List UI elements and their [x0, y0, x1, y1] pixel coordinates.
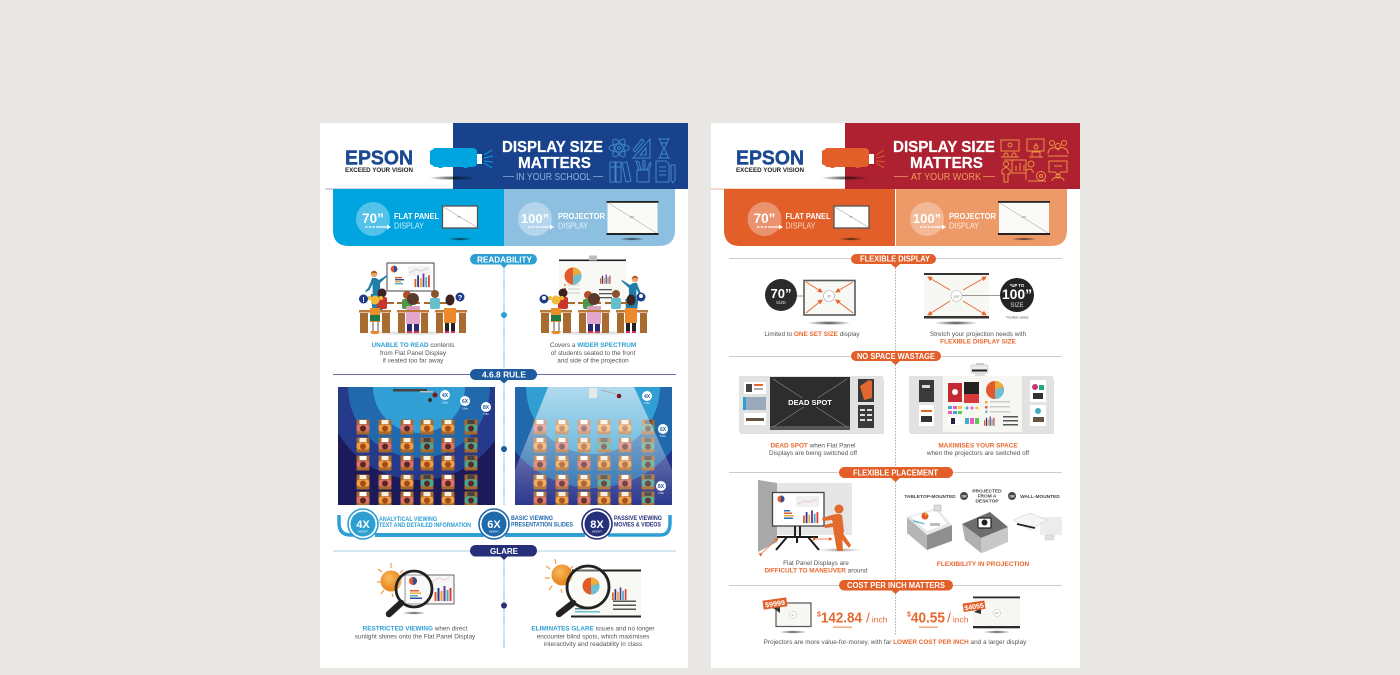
- zone badges: 5.8m: [462, 406, 469, 410]
- zone badges: 6X: [660, 427, 667, 433]
- projector size badge: [518, 202, 554, 236]
- zone badges: 8X: [483, 405, 490, 411]
- illustration: moving flat panel on stand: [758, 480, 862, 553]
- section: flexible placement: [729, 467, 1062, 574]
- title: DISPLAY SIZE: [893, 139, 995, 156]
- labels: mounting options: DESKTOP: [975, 498, 999, 504]
- labels: mounting options: WALL-MOUNTED: [1020, 494, 1060, 500]
- illustration: wall with dead spot: DEAD SPOT: [788, 398, 832, 407]
- icon: projector screen: [998, 201, 1050, 240]
- illustration: fixed-size display: 70”: [771, 286, 791, 301]
- illustration: classroom with projector: [538, 256, 650, 336]
- labels: mounting options: OR: [961, 494, 967, 498]
- heading: no space wastage: [851, 351, 941, 365]
- text: eliminates glare: interactivity and readability in class: [544, 641, 642, 648]
- zone badges: 4X: [442, 393, 449, 399]
- badge: 6X: HEIGHT: [489, 530, 499, 534]
- section: cost per inch matters: [729, 580, 1062, 646]
- legend: viewing distance bar: [339, 509, 670, 539]
- text: analytical viewing: ANALYTICAL VIEWING: [379, 516, 437, 523]
- section: no space wastage: [729, 351, 1062, 457]
- heading: flexible placement: [839, 467, 953, 482]
- figure: flat panel cost per inch: /inch: [866, 610, 888, 626]
- text: eliminates glare: ELIMINATES GLARE issues and no longer: [531, 626, 655, 632]
- text: basic viewing: [511, 515, 573, 528]
- illustration: flat panel with price tag: $9999: [764, 598, 785, 610]
- figure: projector cost per inch: /inch: [947, 610, 969, 626]
- icon: idea bubble left: [540, 294, 548, 304]
- title: [893, 139, 995, 183]
- text: unable to read: from Flat Panel Display: [380, 350, 447, 357]
- figure: flat panel cost per inch: $: [817, 612, 821, 618]
- zone badges: [440, 390, 491, 416]
- text: maximises your space: when the projectors are switched off: [926, 450, 1029, 457]
- heading: glare: [470, 545, 537, 560]
- section: flexible display: [729, 254, 1062, 346]
- labels: mounting options: PROJECTED: [972, 490, 1002, 494]
- zone badges: 6X: [462, 399, 469, 405]
- flat panel size badge: [356, 202, 391, 236]
- illustration: no glare on projector: [545, 559, 641, 618]
- text: basic viewing: PRESENTATION SLIDES: [511, 522, 573, 528]
- labels: mounting options: TABLETOP-MOUNTED: [904, 494, 956, 500]
- logo: Epson: EPSON: [345, 146, 413, 170]
- label: projector display: DISPLAY: [558, 222, 589, 230]
- projector size badge: 100”: [913, 211, 941, 226]
- icon: projector screen: 100”: [629, 216, 635, 219]
- title: MATTERS: [518, 155, 591, 172]
- heading: readability: [470, 254, 537, 268]
- label: flat panel display: FLAT PANEL: [786, 212, 831, 221]
- icons: work situations: [1001, 139, 1068, 182]
- icon: projector: [429, 148, 493, 180]
- label: projector display: DISPLAY: [949, 222, 980, 230]
- heading: glare: GLARE: [490, 546, 518, 556]
- chart: projector viewing zones: [515, 387, 672, 505]
- label: flat panel display: FLAT PANEL: [394, 212, 439, 221]
- illustration: stretchable projection: SIZE: [1010, 303, 1024, 309]
- illustration: flat panel with price tag: 70”: [791, 615, 795, 617]
- badge: 8X: [582, 509, 612, 539]
- illustration: stretchable projection: *UP TO: [1010, 283, 1025, 288]
- figure: projector cost per inch: 40.55: [911, 610, 945, 626]
- projector size badge: 100”: [521, 211, 549, 226]
- section: readability: [357, 254, 650, 365]
- figure: flat panel cost per inch: [817, 610, 888, 628]
- illustration: stretchable projection: 100”: [1002, 286, 1032, 302]
- illustration: flat panel with price tag: [762, 597, 811, 634]
- label: projector display: PROJECTOR: [558, 212, 605, 221]
- text: passive viewing: [614, 515, 662, 528]
- labels: mounting options: [904, 488, 1060, 504]
- figure: projector cost per inch: [907, 610, 969, 628]
- header: school banner: [325, 123, 688, 190]
- heading: cost per inch matters: COST PER INCH MATTERS: [847, 581, 946, 590]
- title: MATTERS: [910, 155, 983, 172]
- text: restricted viewing: sunlight shines onto the Flat Panel Display: [355, 633, 476, 640]
- icon: flat panel: 70”: [849, 216, 853, 219]
- icon: question bubble: ?: [458, 293, 463, 302]
- icon: projector screen: [606, 201, 658, 240]
- zone badges: 3.9m: [644, 401, 651, 405]
- title: IN YOUR SCHOOL: [516, 172, 591, 183]
- label: flat panel display: [394, 212, 439, 230]
- text: maximises your space: MAXIMISES YOUR SPACE: [938, 442, 1018, 450]
- logo: Epson: EPSON: [736, 146, 804, 170]
- label: flat panel display: [786, 212, 831, 230]
- zone badges: [642, 391, 668, 495]
- text: difficult to maneuver: DIFFICULT TO MANEUVER around: [764, 567, 868, 574]
- illustration: wall with dead spot: [739, 376, 884, 434]
- badge: 6X: [479, 509, 509, 539]
- text: flexibility in projection: FLEXIBILITY IN PROJECTION: [937, 561, 1030, 568]
- text: value for money: Projectors are more value-for-money, with far LOWER COST PER INCH and a larger display: [764, 639, 1027, 646]
- text: basic viewing: BASIC VIEWING: [511, 515, 553, 522]
- flat panel size badge: 70”: [754, 211, 775, 226]
- text: unable to read: if seated too far away: [383, 358, 444, 365]
- header: work banner: [711, 123, 1080, 190]
- illustration: wall mounted: [1013, 513, 1062, 540]
- divider: work dotted spine: [894, 268, 896, 636]
- heading: 4.6.8 rule: [470, 369, 537, 384]
- section: 4.6.8 rule: [333, 369, 676, 540]
- text: flexible display size: Stretch your projection needs with: [930, 331, 1026, 338]
- text: dead spot: Displays are being switched off: [769, 450, 857, 457]
- text: flexible display size: FLEXIBLE DISPLAY SIZE: [940, 339, 1017, 346]
- figure: projector cost per inch: $: [907, 612, 911, 618]
- text: wider spectrum: of students seated to the front: [551, 350, 635, 357]
- zone badges: 8X: [658, 484, 665, 490]
- badge: 8X: 8X: [590, 519, 604, 531]
- heading: cost per inch matters: [839, 580, 953, 594]
- text: difficult to maneuver: Flat Panel Displays are: [783, 560, 849, 567]
- icon: flat panel: [442, 206, 478, 240]
- icon: person pushing display: [822, 504, 851, 551]
- illustration: fixed-size display: 70”: [827, 294, 831, 298]
- icon: ceiling projector: [971, 363, 988, 376]
- illustration: wall with projected content: [909, 363, 1054, 434]
- illustration: stretchable projection: 100”: [953, 294, 960, 298]
- illustration: classroom with flat panel: [357, 263, 469, 336]
- section: glare: [333, 545, 676, 648]
- zone badges: 7.8m: [658, 491, 665, 495]
- zone badges: 4X: [644, 394, 651, 400]
- label: projector display: PROJECTOR: [949, 212, 996, 221]
- badge: 4X: 4X: [356, 519, 370, 531]
- heading: flexible placement: FLEXIBLE PLACEMENT: [853, 468, 938, 478]
- text: one set size: Limited to ONE SET SIZE display: [764, 331, 860, 338]
- title: DISPLAY SIZE: [502, 139, 603, 156]
- text: eliminates glare: encounter blind spots, which maximises: [537, 633, 649, 640]
- labels: mounting options: OR: [1009, 494, 1015, 498]
- text: wider spectrum: and side of the projection: [557, 358, 629, 365]
- logo: Epson: EXCEED YOUR VISION: [345, 168, 413, 174]
- illustration: fixed-size display: SIZE: [776, 300, 786, 305]
- projector size badge: [910, 202, 946, 236]
- title: [502, 139, 603, 183]
- illustration: projector screen with price tag: $4055: [964, 603, 984, 612]
- flat panel size badge: 70”: [362, 211, 384, 226]
- text: passive viewing: MOVIES & VIDEOS: [614, 522, 661, 528]
- chart: flat panel viewing zones: [338, 387, 495, 505]
- label: flat panel display: DISPLAY: [394, 222, 425, 230]
- logo: Epson: EXCEED YOUR VISION: [736, 168, 804, 174]
- icon: flat panel: [834, 206, 869, 240]
- label: projector display: [558, 212, 605, 230]
- comparison band: flat panel vs projector: [724, 189, 1067, 246]
- illustration: projector screen with price tag: [963, 596, 1020, 634]
- panel: school infographic: [320, 123, 694, 668]
- text: restricted viewing: RESTRICTED VIEWING when direct: [363, 626, 467, 632]
- title: AT YOUR WORK: [911, 172, 981, 183]
- icon: exclamation bubble: !: [362, 295, 365, 304]
- heading: readability: READABILITY: [477, 255, 532, 265]
- badge: 4X: HEIGHT: [358, 530, 368, 534]
- labels: mounting options: FROM A: [978, 494, 997, 500]
- badge: 6X: 6X: [487, 519, 501, 531]
- illustration: stretchable projection: *models varies: [1006, 316, 1029, 320]
- figure: flat panel cost per inch: 142.84: [821, 610, 862, 626]
- badge: 4X: [348, 509, 378, 539]
- icon: projector: [821, 148, 885, 180]
- label: flat panel display: DISPLAY: [786, 222, 816, 230]
- illustration: projector screen with price tag: 100”: [995, 613, 999, 615]
- zone badges: 3.9m: [442, 400, 449, 404]
- text: analytical viewing: TEXT AND DETAILED INFORMATION: [379, 522, 471, 529]
- flat panel size badge: [748, 202, 783, 236]
- text: wider spectrum: Covers a WIDER SPECTRUM: [550, 342, 636, 349]
- divider: school dotted spine: [503, 268, 505, 649]
- heading: flexible display: [851, 254, 936, 268]
- heading: flexible display: FLEXIBLE DISPLAY: [860, 254, 931, 264]
- illustration: glare on flat panel: [377, 563, 454, 614]
- text: passive viewing: PASSIVE VIEWING: [614, 515, 662, 522]
- illustration: tabletop mounted: [907, 505, 952, 550]
- zone badges: 5.8m: [660, 434, 667, 438]
- panel: work infographic: [711, 123, 1080, 668]
- heading: no space wastage: NO SPACE WASTAGE: [857, 352, 936, 361]
- icon: flat panel: 70”: [457, 216, 461, 219]
- comparison band: flat panel vs projector: [333, 189, 675, 246]
- illustration: stretchable projection: [924, 273, 1034, 325]
- text: dead spot: DEAD SPOT when Flat Panel: [771, 442, 855, 450]
- badge: 8X: HEIGHT: [592, 530, 602, 534]
- text: unable to read: UNABLE TO READ contents: [372, 342, 454, 349]
- text: analytical viewing: [379, 516, 471, 529]
- illustration: fixed-size display: [765, 279, 855, 325]
- icon: projector screen: 100”: [1021, 216, 1027, 219]
- icon: idea bubble right: [636, 292, 646, 302]
- illustration: projected from a desktop: [962, 512, 1008, 553]
- heading: 4.6.8 rule: 4.6.8 RULE: [482, 370, 526, 380]
- label: projector display: [949, 212, 996, 230]
- icons: school subjects: [609, 137, 675, 183]
- zone badges: 7.8m: [483, 412, 490, 416]
